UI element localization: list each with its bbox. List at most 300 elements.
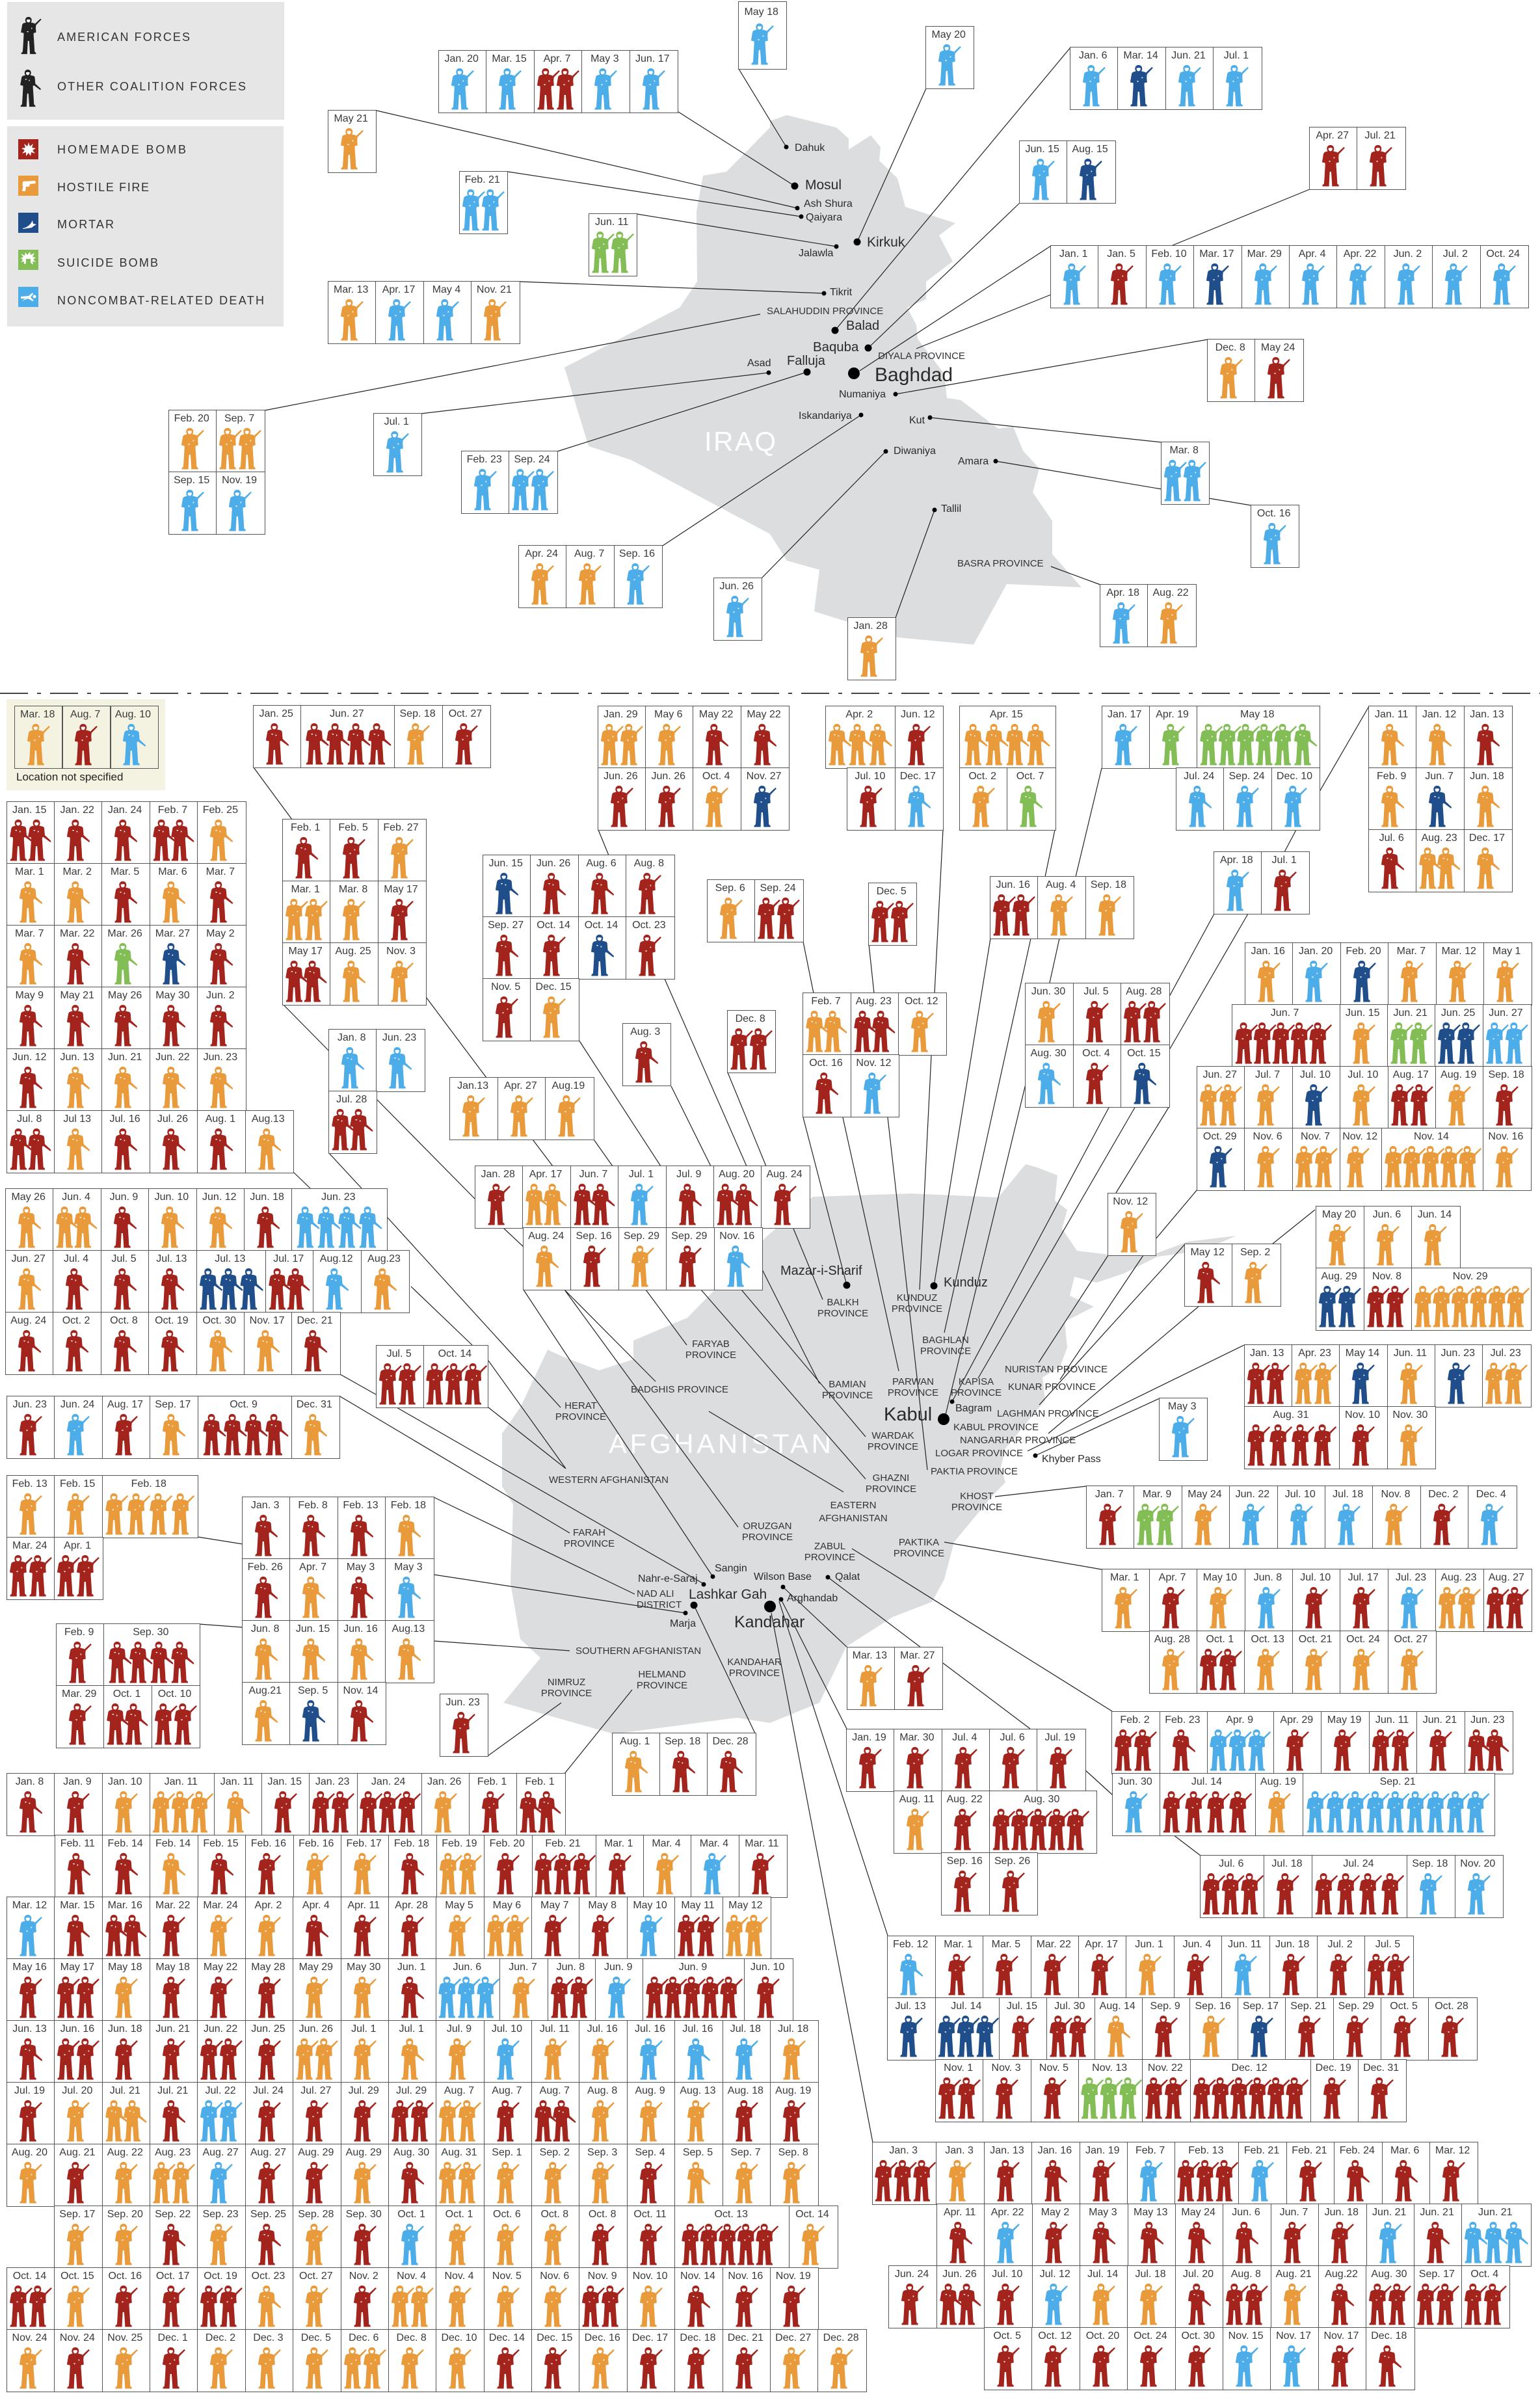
panel: left block, May 26 to Dec. 21 [5, 1188, 410, 1375]
panel: Jan. 3 lower-right block: Oct. 24 [1134, 2330, 1167, 2341]
panel: Helmand Province casualties grid: May 5 [445, 1900, 473, 1911]
panel: Feb. 12 block: Jun. 18 [1275, 1938, 1309, 1950]
panel: Aug. 3: Aug. 3 [630, 1026, 660, 1037]
panel: Khost Province: Jul. 18 [1333, 1489, 1363, 1500]
panel: left block, Jan. 15 to Aug. 13: Feb. 7 [158, 804, 187, 816]
panel: May 12 group: Sep. 2 [1240, 1247, 1270, 1258]
panel: Nimruz: Jun. 23 [445, 1696, 480, 1708]
panel: Salahuddin Province: Feb. 20 [174, 413, 209, 424]
panel: Helmand Province casualties grid: Oct. 1 [445, 2209, 473, 2220]
province: Paktika: PAKTIKA [899, 1537, 939, 1548]
panel: Nov. 12 [1108, 1193, 1156, 1255]
panel: Khyber Pass: May 3 [1168, 1401, 1196, 1412]
panel: Khost Province [1087, 1486, 1517, 1548]
panel: Tikrit: Apr. 17 [382, 284, 415, 295]
panel: Helmand Province casualties grid: Jun. 18 [108, 2023, 142, 2034]
panel: Jan. 16 block: Jun. 25 [1441, 1007, 1475, 1019]
panel: Helmand Province casualties grid: Jun. 6 [453, 1962, 481, 1973]
panel: Helmand Province casualties grid: Jul. 20 [62, 2085, 92, 2096]
panel: Helmand Province casualties grid: May 28 [251, 1962, 285, 1973]
panel: Helmand Province casualties grid: Jul. 22 [205, 2085, 236, 2096]
panel: Jan. 3 lower-right block: Jul. 14 [1087, 2269, 1118, 2280]
panel: Jun. 30 row [1113, 1773, 1494, 1835]
panel: Helmand Province casualties grid: Nov. 25 [107, 2332, 142, 2343]
panel: Helmand Province casualties grid: Oct. 16 [108, 2271, 142, 2282]
panel: Jan. 16 block [1197, 943, 1532, 1190]
panel: left block, May 26 to Dec. 21: Jun. 12 [202, 1192, 237, 1203]
city: Kandahar [734, 1601, 804, 1631]
panel: Jan. 11 block: Jan. 13 [1470, 709, 1504, 720]
panel: Jan. 3 lower-right block: Feb. 21 [1292, 2145, 1327, 2156]
panel: Helmand Province casualties grid: Dec. 21 [728, 2332, 763, 2343]
panel: Helmand Province casualties grid: Sep. 25 [250, 2209, 286, 2220]
panel: Helmand Province casualties grid: May 16 [12, 1962, 47, 1973]
panel: Khost Province: Jan. 7 [1095, 1489, 1123, 1500]
panel: Apr. 15 block: Apr. 15 [990, 709, 1023, 720]
city: Marja: Marja [670, 1618, 696, 1629]
panel: Zabul Province row: Jun. 11 [1375, 1714, 1409, 1725]
panel: Helmand Province casualties grid: Jul. 9 [447, 2023, 471, 2034]
panel: Sep. 6 group: Sep. 6 [715, 883, 745, 894]
panel: Helmand Province casualties grid: Jul. 18 [778, 2023, 808, 2034]
panel: Jan. 28 and Aug. 24 rows: Apr. 17 [529, 1169, 562, 1180]
panel: Paktika Province: Oct. 13 [1251, 1634, 1284, 1645]
panel: Paktika Province [1102, 1569, 1532, 1693]
province: Kapisa: KAPISA [959, 1376, 994, 1387]
panel: May 20 block: May 20 [1322, 1209, 1356, 1220]
panel: Jun. 23 row: Sep. 17 [155, 1398, 191, 1410]
panel: left block, May 26 to Dec. 21: Jun. 23 [321, 1192, 356, 1203]
panel: Baquba: Jun. 15 [1025, 144, 1059, 155]
panel: Feb. 7 block: Oct. 16 [809, 1058, 843, 1069]
panel: Jan. 3 lower-right block [873, 2142, 1531, 2390]
panel: Jan. 3 lower-right block: Oct. 4 [1470, 2269, 1498, 2280]
panel: Jun. 30 row: Aug. 19 [1260, 1776, 1296, 1787]
panel: Jun. 15 block: Jun. 15 [488, 858, 523, 869]
panel: Feb. 1 block: Feb. 1 [291, 822, 320, 833]
panel: Lashkar Gah: Dec. 28 [713, 1736, 749, 1747]
province: Wardak: WARDAK [871, 1430, 914, 1441]
place labels: Iraq [747, 142, 1044, 569]
panel: Balad: Jun. 21 [1171, 50, 1206, 61]
panel: Helmand Province casualties grid: Jun. 9 [604, 1962, 633, 1973]
panel: Jul. 5 group [376, 1345, 488, 1408]
panel: Diyala Province: Jul. 21 [1365, 130, 1396, 141]
city: Tallil [933, 503, 961, 514]
panel: Paktika Province: Aug. 27 [1489, 1572, 1524, 1583]
province: Basra: BASRA PROVINCE [957, 558, 1044, 569]
panel: Aug. 3 [622, 1023, 671, 1086]
panel: Helmand Province casualties grid: Jan. 11 [220, 1776, 254, 1787]
panel: Arghandab: Aug. 11 [899, 1794, 935, 1804]
panel: Jun. 15 block: Aug. 8 [634, 858, 664, 869]
province: Bamian: PROVINCE [822, 1390, 873, 1401]
panel: Helmand Province casualties grid: Sep. 4 [635, 2147, 665, 2158]
panel: Jan. 17 block: Apr. 19 [1156, 709, 1189, 720]
panel: Ash Shura [328, 110, 377, 173]
province: Helmand: HELMAND [638, 1669, 686, 1680]
panel: Jan. 28 and Aug. 24 rows [475, 1166, 810, 1290]
panel: Helmand Province casualties grid: Aug. 27 [202, 2147, 239, 2158]
panel: Helmand Province casualties grid: Jun. 16 [60, 2023, 94, 2034]
region: Southern Afghanistan: SOUTHERN AFGHANISTAN [576, 1646, 701, 1657]
panel: left block, May 26 to Dec. 21: Jul. 13 [156, 1253, 187, 1264]
panel: Feb. 7 block: Oct. 12 [905, 996, 938, 1007]
panel: Feb. 12 block: Jul. 5 [1375, 1938, 1400, 1950]
panel: Jan. 3 block: May 3 [394, 1562, 423, 1573]
panel: Jan. 13 block [1245, 1345, 1531, 1469]
panel: Helmand Province casualties grid: May 17 [60, 1962, 94, 1973]
panel: Jan. 11 block: Jan. 12 [1422, 709, 1456, 720]
panel: Jan. 3 lower-right block: Nov. 17 [1323, 2330, 1359, 2341]
panel: Wilson Base and Qalat [847, 1647, 942, 1709]
panel: Jan. 28 and Aug. 24 rows: Sep. 29 [624, 1231, 659, 1242]
panel: Jan. 17 block: May 18 [1240, 709, 1275, 720]
panel: Helmand Province casualties grid: Dec. 1 [158, 2332, 188, 2343]
panel: Helmand Province casualties grid: Sep. 3 [587, 2147, 617, 2158]
panel: Jan. 3 block: Jan. 3 [251, 1500, 279, 1511]
panel: Jan. 3 block: Jun. 16 [343, 1623, 378, 1634]
panel: Jan. 3 lower-right block: Jun. 7 [1280, 2207, 1308, 2218]
panel: Lashkar Gah: Aug. 1 [620, 1736, 650, 1747]
place: Wilson Base [754, 1571, 812, 1590]
panel: Feb. 12 block: Sep. 16 [1195, 2001, 1231, 2011]
panel: Helmand Province casualties grid: Jun. 13 [12, 2023, 47, 2034]
province: Nimruz: PROVINCE [541, 1688, 592, 1699]
panel: Jan. 17 block: Dec. 10 [1277, 771, 1312, 782]
panel: Helmand Province casualties grid: Dec. 8 [396, 2332, 427, 2343]
panel: Feb. 12 block: Nov. 13 [1092, 2062, 1127, 2073]
panel: Helmand Province casualties grid: Jul. 29 [349, 2085, 379, 2096]
panel: Paktika Province: Apr. 7 [1159, 1572, 1186, 1583]
panel: left block, May 26 to Dec. 21: Aug. 24 [10, 1315, 46, 1326]
panel: left block, May 26 to Dec. 21: Aug.12 [320, 1253, 352, 1264]
panel: Helmand Province casualties grid: Jul. 21 [157, 2085, 188, 2096]
panel: Helmand Province casualties grid: Nov. 4 [397, 2271, 426, 2282]
city: Kandahar: Kandahar [734, 1613, 804, 1631]
panel: Feb. 9 block: Oct. 10 [158, 1688, 191, 1700]
panel: Numaniya: May 24 [1261, 342, 1295, 353]
panel: May 12 group: May 12 [1190, 1247, 1225, 1258]
panel: Jun. 23 row: Aug. 17 [107, 1398, 143, 1410]
panel: Jun. 23 row: Jun. 24 [60, 1398, 94, 1410]
city: Dahuk: Dahuk [795, 142, 825, 153]
leader lines: Iraq [265, 47, 1310, 618]
panel: Jan. 13 group: Jan.13 [457, 1080, 488, 1091]
panel: Iskandariya: Apr. 24 [525, 548, 558, 559]
panel: Helmand Province casualties grid [7, 1774, 866, 2392]
panel: Jan. 11 block: Aug. 23 [1422, 833, 1457, 844]
panel: Helmand Province casualties grid: Jun. 7 [509, 1962, 537, 1973]
panel: left block, Jan. 15 to Aug. 13 [7, 801, 294, 1173]
panel: Iskandariya [518, 545, 663, 608]
panel: Jan. 16 block: Mar. 12 [1442, 946, 1476, 957]
panel: Tikrit: Mar. 13 [334, 284, 368, 295]
panel: Arghandab: Jul. 4 [952, 1731, 977, 1743]
province: Nangarhar: NANGARHAR PROVINCE [960, 1435, 1076, 1446]
panel: Paktika Province: Oct. 24 [1346, 1634, 1380, 1645]
panel: Helmand Province casualties grid: Nov. 24 [60, 2332, 95, 2343]
panel: Jul. 6 row: Nov. 20 [1460, 1858, 1495, 1869]
panel: Jun. 30 block: Aug. 30 [1030, 1047, 1067, 1059]
province: Kandahar: KANDAHAR [727, 1657, 782, 1668]
panel: Helmand Province casualties grid: Aug. 13 [680, 2085, 716, 2096]
panel: Jan. 3 lower-right block: Nov. 15 [1228, 2330, 1264, 2341]
icon: American soldier [21, 17, 42, 54]
panel: Jan. 3 lower-right block: Aug. 8 [1231, 2269, 1261, 2280]
panel: Paktika Province: Aug. 23 [1440, 1572, 1476, 1583]
panel: Jan. 25 group: Jan. 25 [259, 708, 293, 719]
province: Kapisa: PROVINCE [951, 1387, 1002, 1398]
panel: Helmand Province casualties grid: May 6 [493, 1900, 521, 1911]
panel: Helmand Province casualties grid: Nov. 16 [728, 2271, 763, 2282]
panel: Jan. 3 lower-right block: Apr. 22 [991, 2207, 1024, 2218]
panel: Jan. 8 block [328, 1029, 425, 1154]
panel: left block, Jan. 15 to Aug. 13: Aug. 1 [206, 1113, 235, 1124]
panel: Jan. 16 block: Jun. 27 [1202, 1069, 1237, 1080]
province: Kunar: KUNAR PROVINCE [1008, 1381, 1096, 1393]
panel: Apr. 2 block: Apr. 2 [845, 709, 873, 720]
province: Balkh: BALKH [827, 1297, 859, 1308]
panel: Baghdad: Apr. 4 [1299, 248, 1326, 260]
panel: Mosul: May 3 [591, 53, 619, 64]
panel: Feb. 12 block: Jul. 30 [1054, 2001, 1085, 2011]
panel: Helmand Province casualties grid: Oct. 6 [493, 2209, 521, 2220]
panel: left block, Jan. 15 to Aug. 13: Jun. 23 [204, 1051, 237, 1063]
panel: Helmand Province casualties grid: Jan. 15 [268, 1776, 302, 1787]
panel: Jan. 3 lower-right block: May 24 [1181, 2207, 1215, 2218]
panel: location not specified: Location not specified [16, 771, 123, 783]
panel: Apr. 2 block: Jun. 12 [901, 709, 935, 720]
panel: Helmand Province casualties grid: Dec. 17 [632, 2332, 668, 2343]
panel: Nimruz [440, 1694, 488, 1757]
panel: Apr. 2 block: Dec. 17 [900, 771, 936, 782]
panel: Ash Shura: May 21 [334, 113, 368, 124]
panel: Jan. 17 block: Sep. 24 [1229, 771, 1265, 782]
panel: Helmand Province casualties grid: Feb. 14 [155, 1838, 191, 1849]
province: Farah: PROVINCE [564, 1538, 615, 1549]
panel: Apr. 15 block: Oct. 7 [1016, 771, 1044, 782]
panel: Feb. 9 block: Mar. 29 [62, 1688, 96, 1700]
panel: Jan. 16 block: Mar. 7 [1397, 946, 1426, 957]
city: Sangin [710, 1563, 747, 1579]
city: Qalat: Qalat [835, 1571, 860, 1582]
panel: Jan. 3 lower-right block: Jun. 26 [942, 2269, 977, 2280]
panel: Qaiyara: Feb. 21 [465, 174, 500, 185]
province: Oruzgan: PROVINCE [742, 1532, 793, 1543]
panel: Basra Province: Apr. 18 [1106, 587, 1139, 598]
panel: left block, Jan. 15 to Aug. 13: Mar. 6 [158, 866, 187, 877]
panel: Helmand Province casualties grid: May 8 [588, 1900, 617, 1911]
panel: Jan. 16 block: May 1 [1493, 946, 1520, 957]
city: Kirkuk: Kirkuk [867, 235, 905, 250]
panel: Jan. 3 lower-right block: Feb. 21 [1244, 2145, 1279, 2156]
panel: Jan. 13 block: Jun. 11 [1394, 1348, 1427, 1359]
panel: Helmand Province casualties grid: Oct. 1 [397, 2209, 425, 2220]
panel: Jan. 3 lower-right block: Jan. 3 [889, 2145, 918, 2156]
panel: Helmand Province casualties grid: Aug. 7 [492, 2085, 522, 2096]
panel: Feb. 13 block: Feb. 15 [60, 1478, 95, 1489]
province: Khost: PROVINCE [951, 1502, 1002, 1513]
panel: Feb. 12 block: Nov. 22 [1148, 2062, 1183, 2073]
panel: Zabul Province row [1112, 1712, 1513, 1773]
panel: Amara [1251, 505, 1299, 568]
panel: Jan. 29 block [598, 706, 790, 831]
panel: Jan. 3 lower-right block: Nov. 17 [1276, 2330, 1311, 2341]
panel: left block, Jan. 15 to Aug. 13: May 21 [60, 990, 94, 1000]
panel: Helmand Province casualties grid: Aug. 31 [441, 2147, 477, 2158]
panel: Feb. 12 block: Sep. 29 [1338, 2001, 1374, 2011]
province: Herat: PROVINCE [555, 1411, 606, 1422]
panel: Paktika Province: Jul. 17 [1348, 1572, 1379, 1583]
panel: Helmand Province casualties grid: May 18 [155, 1962, 190, 1973]
panel: Helmand Province casualties grid: Aug. 30 [393, 2147, 429, 2158]
panel: Feb. 7 block: Nov. 12 [856, 1058, 891, 1069]
panel: Feb. 1 block: Aug. 25 [336, 946, 371, 956]
panel: Diwaniya: Jun. 26 [719, 581, 754, 592]
panel: Apr. 2 block [826, 706, 943, 830]
panel: Mosul [438, 50, 678, 113]
panel: Jan. 17 block [1102, 706, 1320, 830]
panel: Baghdad: Oct. 24 [1486, 248, 1520, 260]
province: Helmand: PROVINCE [637, 1680, 687, 1691]
city: Balad [831, 319, 879, 334]
panel: Helmand Province casualties grid: Jun. 9 [679, 1962, 707, 1973]
panel: left block, Jan. 15 to Aug. 13: Jul. 8 [17, 1113, 42, 1124]
panel: Jan. 16 block: Aug. 17 [1393, 1069, 1429, 1080]
panel: Helmand Province casualties grid: Aug. 7 [444, 2085, 474, 2096]
panel: Apr. 15 block: Oct. 2 [968, 771, 996, 782]
panel: Balad [1070, 47, 1262, 110]
city: Mazar-i-Sharif: Mazar-i-Sharif [780, 1264, 862, 1278]
map: Afghanistan [502, 1164, 1236, 1734]
province: Parwan: PROVINCE [888, 1387, 938, 1398]
panel: Jan. 3 lower-right block: Sep. 17 [1419, 2269, 1455, 2280]
panel: Helmand Province casualties grid: Feb. 17 [346, 1838, 382, 1849]
panel: Jan. 29 block: May 6 [654, 709, 683, 720]
panel: Feb. 12 block: Mar. 1 [944, 1938, 973, 1950]
panel: Jan. 13 block: Jul. 23 [1491, 1348, 1521, 1359]
panel: Jun. 23 row: Jun. 23 [12, 1398, 47, 1410]
panel: Jan. 3 lower-right block: May 3 [1089, 2207, 1117, 2218]
panel: Jan. 3 block: Apr. 7 [299, 1562, 326, 1573]
panel: Jan. 3 lower-right block: Jul. 18 [1135, 2269, 1166, 2280]
panel: Jun. 30 block [1026, 983, 1169, 1107]
panel: Helmand Province casualties grid: Feb. 16 [251, 1838, 286, 1849]
city: Mosul: Mosul [805, 178, 842, 193]
panel: Jan. 3 block: Feb. 13 [343, 1500, 378, 1511]
panel: left block, May 26 to Dec. 21: Jun. 4 [62, 1192, 90, 1203]
panel: Arghandab: Jul. 6 [1000, 1731, 1025, 1743]
panel: Feb. 12 block: Mar. 22 [1037, 1938, 1071, 1950]
city: Lashkar Gah: Lashkar Gah [689, 1587, 767, 1602]
panel: location not specified [7, 699, 165, 790]
panel: left block, Jan. 15 to Aug. 13: Jan. 15 [12, 804, 47, 816]
panel: Balad: Mar. 14 [1123, 50, 1158, 61]
panel: Paktika Province: Oct. 27 [1394, 1634, 1427, 1645]
panel: Khost Province: Nov. 8 [1381, 1489, 1411, 1500]
panel: Feb. 1 block [282, 819, 427, 1006]
city: Kabul: Kabul [884, 1404, 932, 1425]
panel: left block, Jan. 15 to Aug. 13: May 9 [16, 990, 44, 1000]
panel: Falluja: Feb. 23 [467, 454, 502, 465]
panel: May 18 Dahuk: May 18 [744, 7, 778, 18]
panel: Dec. 8: Dec. 8 [736, 1013, 765, 1024]
panel: Jan. 3 block: Jun. 8 [251, 1623, 279, 1634]
panel: left block, Jan. 15 to Aug. 13: Mar. 7 [206, 866, 235, 877]
panel: Jan. 3 lower-right block: Jul. 12 [1040, 2269, 1070, 2280]
panel: Jan. 11 block: Feb. 9 [1377, 771, 1406, 782]
panel: Kirkuk: May 20 [931, 29, 966, 40]
panel: Helmand Province casualties grid: Dec. 14 [489, 2332, 525, 2343]
panel: Jan. 3 lower-right block: Feb. 24 [1340, 2145, 1375, 2156]
panel: Paktika Province: Jul. 10 [1300, 1572, 1331, 1583]
province: Salahuddin: SALAHUDDIN PROVINCE [767, 306, 883, 317]
panel: Numaniya [1207, 339, 1304, 402]
panel: Helmand Province casualties grid: Jul. 11 [540, 2023, 570, 2034]
city: Mazar-i-Sharif [780, 1264, 862, 1289]
panel: Apr. 18 group [1214, 852, 1309, 914]
panel: left block, Jan. 15 to Aug. 13: Jun. 22 [155, 1051, 190, 1063]
panel: Jan. 11 block: Jun. 7 [1425, 771, 1454, 782]
panel: Helmand Province casualties grid: Apr. 2 [255, 1900, 282, 1911]
panel: May 18 Dahuk [738, 1, 787, 70]
province: Faryab: PROVINCE [685, 1350, 736, 1361]
panel: Jul. 6 row: Jul. 6 [1219, 1858, 1243, 1869]
panel: Jun. 15 block: Oct. 14 [585, 920, 618, 931]
panel: left block, Jan. 15 to Aug. 13: Jan. 22 [60, 804, 94, 816]
panel: Mosul: Jun. 17 [635, 53, 670, 64]
icon: suicide bomb [18, 250, 38, 270]
panel: Jun. 15 block: Nov. 5 [491, 981, 520, 993]
panel: Helmand Province casualties grid: Jun. 10 [750, 1962, 784, 1973]
panel: Helmand Province casualties grid: Aug. 9 [635, 2085, 665, 2096]
panel: Baquba [1019, 140, 1116, 204]
panel: Tallil: Jan. 28 [853, 620, 888, 632]
panel: Helmand Province casualties grid: Oct. 15 [60, 2271, 94, 2282]
panel: Helmand Province casualties grid: Feb. 16 [299, 1838, 334, 1849]
panel: Jan. 3 block: Aug.13 [392, 1623, 425, 1634]
panel: Jan. 28 and Aug. 24 rows: Aug. 24 [766, 1169, 803, 1180]
panel: Jul. 6 row: Jul. 18 [1271, 1858, 1303, 1869]
city: Baghdad: Baghdad [875, 364, 953, 386]
province: Nuristan: NURISTAN PROVINCE [1005, 1364, 1108, 1375]
legend: causes of death [7, 126, 284, 327]
panel: Jan. 3 lower-right block: Jun. 21 [1372, 2207, 1406, 2218]
panel: left block, Jan. 15 to Aug. 13: Mar. 22 [60, 927, 94, 939]
province: Laghman: LAGHMAN PROVINCE [997, 1408, 1099, 1419]
panel: Feb. 9 block [56, 1623, 200, 1748]
panel: Tallil [847, 617, 896, 680]
panel: Helmand Province casualties grid: Nov. 9 [588, 2271, 617, 2282]
panel: Paktika Province: Oct. 21 [1299, 1634, 1332, 1645]
panel: Jan. 3 lower-right block: Jan. 16 [1038, 2145, 1072, 2156]
panel: Nov. 12: Nov. 12 [1113, 1195, 1148, 1207]
province: Ghazni: PROVINCE [866, 1484, 916, 1495]
panel: Jun. 30 block: Oct. 4 [1082, 1047, 1110, 1059]
panel: Helmand Province casualties grid: Sep. 1 [492, 2147, 522, 2158]
panel: Jan. 16 block: Jul. 10 [1348, 1069, 1378, 1080]
panel: left block, Jan. 15 to Aug. 13: May 30 [155, 990, 190, 1000]
panel: Jun. 30 block: Jun. 30 [1031, 986, 1065, 996]
panel: Feb. 9 block: Feb. 9 [64, 1627, 94, 1638]
panel: Jan. 3 lower-right block: Jun. 6 [1232, 2207, 1260, 2218]
panel: Helmand Province casualties grid: Jul. 21 [110, 2085, 140, 2096]
legend text: homemade bomb: HOMEMADE BOMB [57, 143, 186, 156]
panel: Kirkuk [925, 26, 974, 89]
panel: Helmand Province casualties grid: Nov. 2 [349, 2271, 378, 2282]
panel: Helmand Province casualties grid: May 11 [681, 1900, 715, 1911]
